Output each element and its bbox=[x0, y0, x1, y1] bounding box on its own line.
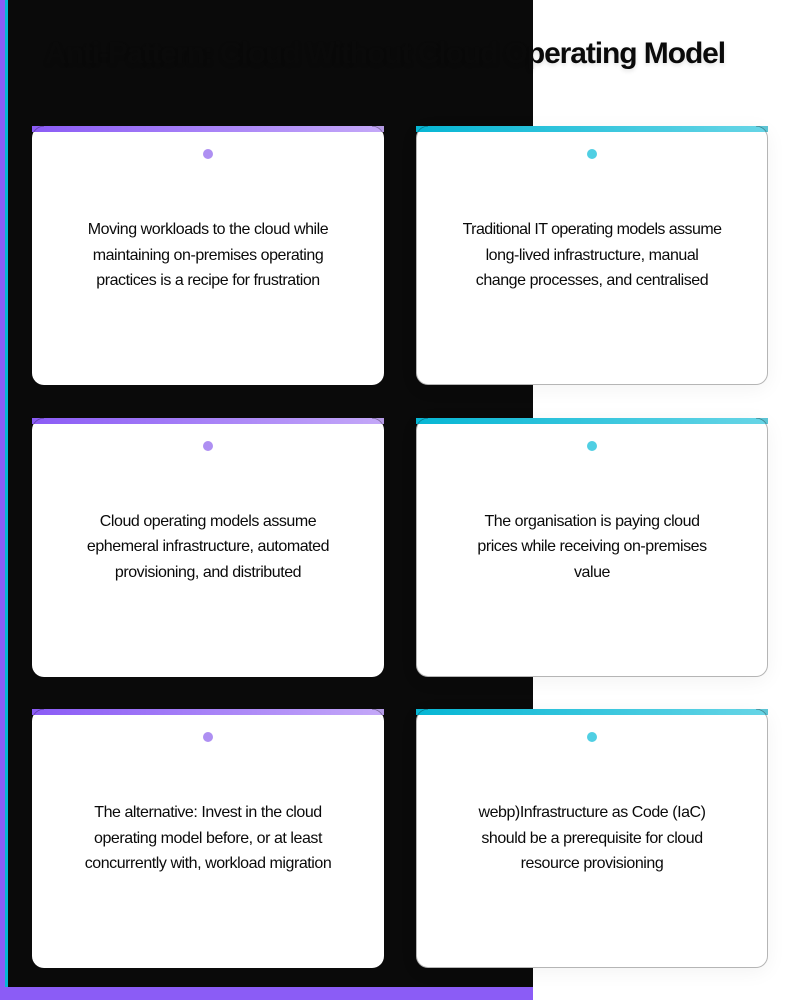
card 5 text bbox=[85, 804, 331, 872]
card 5 text: operating model before, or at least bbox=[94, 830, 322, 847]
card 6 text: should be a prerequisite for cloud bbox=[481, 830, 703, 847]
card 3 dot bbox=[203, 440, 213, 450]
card 1 top bar bbox=[32, 126, 384, 132]
left accent bar bbox=[0, 0, 8, 1000]
card 3 bbox=[32, 418, 384, 676]
card 1 dot bbox=[203, 149, 213, 159]
card 2 dot bbox=[587, 149, 597, 159]
card 5 text: The alternative: Invest in the cloud bbox=[94, 804, 322, 821]
card 5 dot bbox=[203, 732, 213, 742]
card 2 text: long-lived infrastructure, manual bbox=[486, 247, 698, 264]
card 6 top bar bbox=[416, 709, 768, 715]
card 3 text: provisioning, and distributed bbox=[115, 564, 301, 581]
card 3 text: Cloud operating models assume bbox=[100, 512, 316, 530]
card 4 text: prices while receiving on-premises bbox=[477, 538, 707, 555]
card 4 bbox=[416, 418, 768, 676]
card 6 text bbox=[478, 804, 706, 872]
card 4 top bar bbox=[416, 418, 768, 424]
card 1 text: Moving workloads to the cloud while bbox=[88, 221, 328, 238]
card 1 text: practices is a recipe for frustration bbox=[96, 272, 320, 289]
card 4 dot bbox=[587, 440, 597, 450]
card 2 text: change processes, and centralised bbox=[476, 272, 708, 289]
card 3 text bbox=[87, 512, 329, 581]
card 6 dot bbox=[587, 732, 597, 742]
card 4 text: The organisation is paying cloud bbox=[484, 512, 700, 530]
dark background panel bbox=[0, 0, 533, 1000]
card 2 bbox=[416, 126, 768, 385]
card 5 text: concurrently with, workload migration bbox=[85, 855, 331, 872]
card 3 text: ephemeral infrastructure, automated bbox=[87, 538, 329, 555]
card 3 top bar bbox=[32, 418, 384, 424]
card 1 text: maintaining on-premises operating bbox=[93, 247, 323, 264]
card 5 top bar bbox=[32, 709, 384, 715]
card 2 top bar bbox=[416, 126, 768, 132]
card 2 text: Traditional IT operating models assume bbox=[463, 221, 721, 238]
bottom accent bar bbox=[0, 987, 533, 1000]
card 4 text bbox=[477, 512, 707, 581]
card 6 bbox=[416, 709, 768, 968]
card 5 bbox=[32, 709, 384, 968]
card 1 text bbox=[88, 221, 328, 289]
card 6 text: webp)Infrastructure as Code (IaC) bbox=[478, 804, 706, 821]
card 6 text: resource provisioning bbox=[521, 855, 663, 872]
card 1 bbox=[32, 126, 384, 385]
card 2 text bbox=[463, 221, 722, 289]
card 4 text: value bbox=[574, 564, 610, 581]
title: Anti-Pattern: Cloud Without Cloud Operating Model bbox=[45, 37, 725, 70]
